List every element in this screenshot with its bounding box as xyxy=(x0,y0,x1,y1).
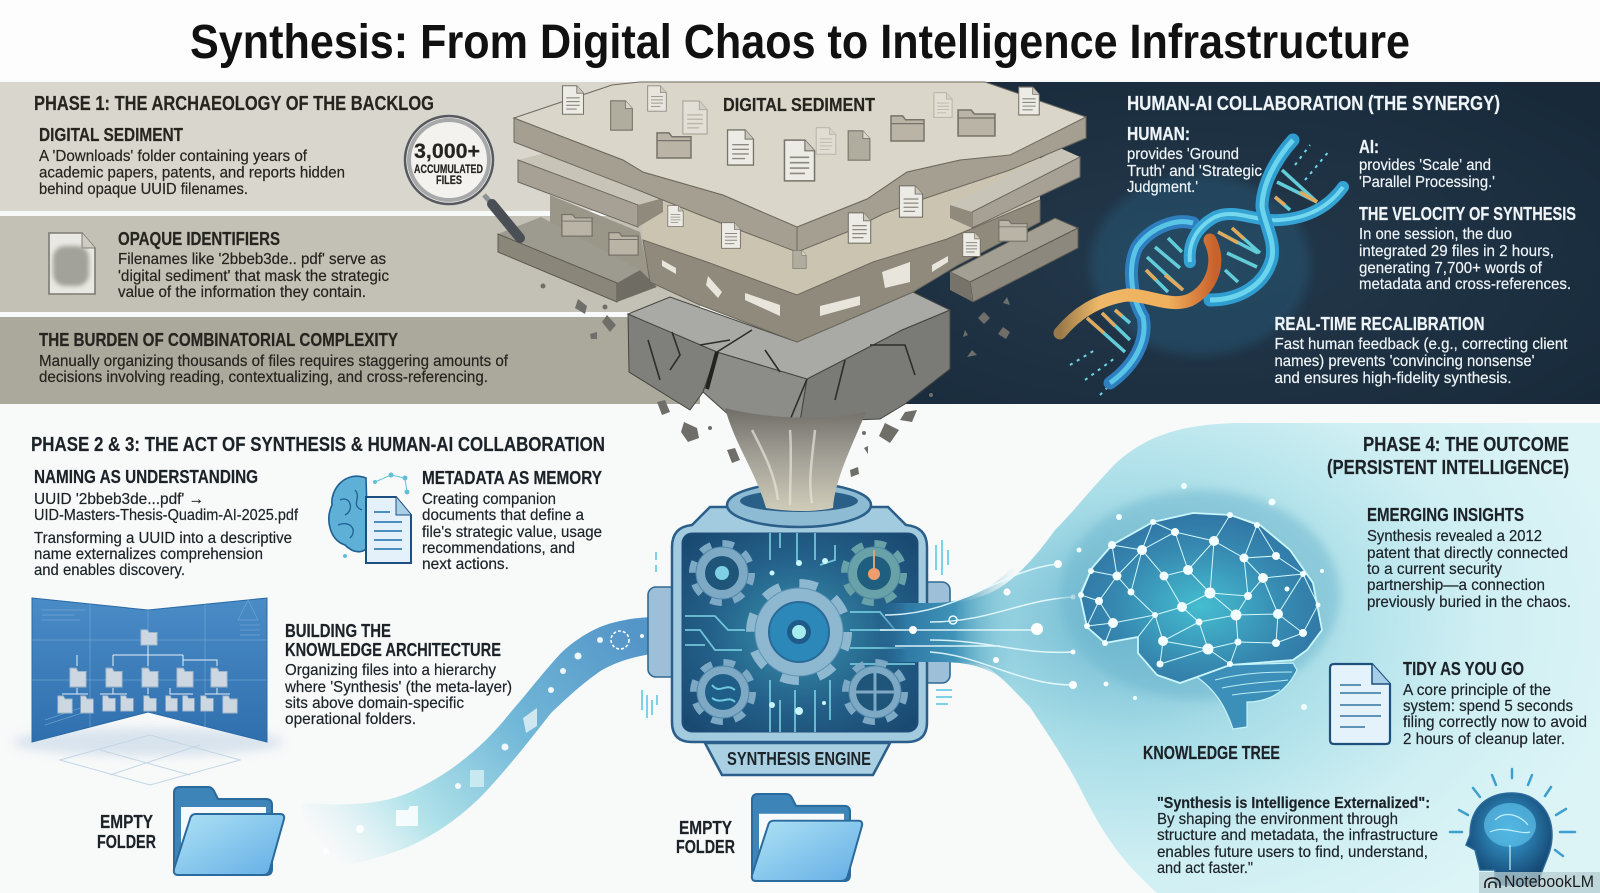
second slab xyxy=(518,148,1080,228)
text block: metadata as memory: Creating companion xyxy=(422,491,556,508)
panel content: human-ai collaboration xyxy=(1060,92,1576,395)
label: empty folder left: FOLDER xyxy=(97,832,156,852)
text block: building the knowledge architecture: KNOWLEDGE ARCHITECTURE xyxy=(285,640,501,660)
icon: empty folder left xyxy=(174,787,284,875)
icon: glowing knowledge brain xyxy=(1060,483,1340,729)
text block: ai role xyxy=(1359,137,1495,191)
text block: naming as understanding: name externalizes comprehension xyxy=(34,546,263,563)
scattered documents and folders xyxy=(562,86,1039,269)
text block: real-time recalibration: and ensures high-fidelity synthesis. xyxy=(1274,370,1512,387)
intake ring xyxy=(727,483,871,527)
text block: velocity of synthesis: generating 7,700+ words of xyxy=(1359,260,1543,277)
callout: synthesis quote: By shaping the environment through xyxy=(1157,811,1398,828)
text block: real-time recalibration: REAL-TIME RECALIBRATION xyxy=(1274,314,1484,334)
text block: building the knowledge architecture: operational folders. xyxy=(285,711,416,728)
text block: metadata as memory: file's strategic value, usage xyxy=(422,524,602,541)
side lugs xyxy=(648,587,678,677)
text block: real-time recalibration: names) prevents 'convincing nonsense' xyxy=(1274,353,1534,370)
chassis xyxy=(672,507,927,742)
gear top right xyxy=(844,544,904,602)
label: empty folder center: EMPTY xyxy=(679,818,732,838)
falling rock debris xyxy=(540,284,1010,477)
text block: emerging insights: Synthesis revealed a 2012 xyxy=(1367,528,1542,545)
callout: synthesis quote: "Synthesis is Intelligence Externalized": xyxy=(1157,795,1430,812)
engine nameplate xyxy=(705,743,890,775)
text block: building the knowledge architecture: sits above domain-specific xyxy=(285,695,464,712)
text block: combinatorial complexity: Manually organizing thousands of files requires staggering amounts of xyxy=(39,353,509,370)
title: Synthesis: From Digital Chaos to Intelligence Infrastructure xyxy=(190,16,1410,69)
text block: human role: Truth' and 'Strategic xyxy=(1127,163,1262,180)
flow ribbon from empty folder to engine xyxy=(301,617,660,870)
text block: opaque identifiers: value of the information they contain. xyxy=(118,284,366,301)
text block: real-time recalibration: Fast human feedback (e.g., correcting client xyxy=(1274,336,1568,353)
text block: velocity of synthesis: metadata and cross-references. xyxy=(1359,276,1571,293)
panel: phase 4 outcome background xyxy=(922,423,1600,893)
panel content: phase 2 and 3 xyxy=(13,433,862,881)
circuit traces xyxy=(685,533,918,732)
panel content: phase 1 xyxy=(34,92,875,386)
panel: phase 1 sediment bands xyxy=(0,82,1000,404)
text block: naming as understanding xyxy=(34,467,299,579)
central gear xyxy=(751,584,847,680)
text block: naming as understanding: UID-Masters-Thesis-Quadim-AI-2025.pdf xyxy=(34,507,299,524)
text block: metadata as memory: next actions. xyxy=(422,556,509,573)
heading: phase 4 xyxy=(1327,433,1569,479)
icon: blurred opaque document xyxy=(49,233,95,294)
text block: tidy as you go: system: spend 5 seconds xyxy=(1403,698,1573,715)
text block: building the knowledge architecture: Organizing files into a hierarchy xyxy=(285,662,496,679)
label: empty folder center xyxy=(676,818,735,857)
engine nameplate: SYNTHESIS ENGINE xyxy=(727,749,871,769)
text block: naming as understanding: Transforming a UUID into a descriptive xyxy=(34,530,292,547)
text block: real-time recalibration xyxy=(1274,314,1568,387)
callout: synthesis quote: structure and metadata, the infrastructure xyxy=(1157,827,1438,844)
text block: ai role: AI: xyxy=(1359,137,1379,157)
text block: velocity of synthesis xyxy=(1359,204,1576,293)
text block: emerging insights: to a current security xyxy=(1367,561,1502,578)
text block: building the knowledge architecture: where 'Synthesis' (the meta-layer) xyxy=(284,679,512,696)
text block: opaque identifiers: OPAQUE IDENTIFIERS xyxy=(118,229,280,249)
label: knowledge tree: KNOWLEDGE TREE xyxy=(1143,743,1280,763)
middle stratum xyxy=(640,150,1040,342)
sediment stream into engine xyxy=(725,408,866,511)
illustration: knowledge architecture blueprint xyxy=(13,598,283,785)
watermark: NotebookLM: NotebookLM xyxy=(1504,872,1594,891)
text block: metadata as memory xyxy=(422,468,602,573)
spark marks around engine xyxy=(642,540,952,718)
text block: human role: HUMAN: xyxy=(1127,124,1190,144)
panel content: phase 4 xyxy=(1143,433,1587,885)
text block: digital sediment: academic papers, patents, and reports hidden xyxy=(39,164,345,182)
text block: metadata as memory: recommendations, and xyxy=(422,540,575,557)
icon: empty folder center xyxy=(752,794,862,881)
icon: tidy document xyxy=(1330,664,1390,744)
text block: opaque identifiers: 'digital sediment' that mask the strategic xyxy=(118,268,389,285)
label: digital sediment strata: DIGITAL SEDIMENT xyxy=(723,95,875,115)
text block: tidy as you go: TIDY AS YOU GO xyxy=(1403,659,1524,679)
text block: emerging insights xyxy=(1367,505,1571,611)
text block: emerging insights: previously buried in the chaos. xyxy=(1367,594,1571,611)
label: empty folder center: FOLDER xyxy=(676,837,735,857)
text block: combinatorial complexity xyxy=(39,330,509,386)
text block: tidy as you go xyxy=(1403,659,1587,748)
text block: combinatorial complexity: THE BURDEN OF COMBINATORIAL COMPLEXITY xyxy=(39,330,398,350)
text block: tidy as you go: A core principle of the xyxy=(1403,682,1551,699)
panel: human-ai collaboration background xyxy=(860,82,1600,404)
icon: magnifier with file count: ACCUMULATED xyxy=(414,162,483,176)
data streams from engine to brain xyxy=(880,560,1077,689)
text block: combinatorial complexity: decisions involving reading, contextualizing, and cross-referencing. xyxy=(39,369,488,386)
text block: building the knowledge architecture: BUILDING THE xyxy=(285,621,391,641)
text block: human role: Judgment.' xyxy=(1127,179,1198,196)
text block: digital sediment: A 'Downloads' folder containing years of xyxy=(39,148,308,165)
text block: tidy as you go: filing correctly now to avoid xyxy=(1403,714,1587,731)
heading: phase 2 and 3: PHASE 2 & 3: THE ACT OF SYNTHESIS & HUMAN-AI COLLABORATION xyxy=(31,433,605,456)
heading: phase 1: PHASE 1: THE ARCHAEOLOGY OF THE BACKLOG xyxy=(34,92,434,115)
icon: head with glowing brain xyxy=(1450,769,1575,885)
text block: emerging insights: patent that directly connected xyxy=(1367,545,1568,562)
icon: magnifier with file count: 3,000+ xyxy=(414,140,480,163)
icon: magnifier with file count: FILES xyxy=(436,173,462,187)
text block: human role xyxy=(1127,124,1262,196)
text block: ai role: provides 'Scale' and xyxy=(1359,157,1491,174)
text block: tidy as you go: 2 hours of cleanup later. xyxy=(1403,731,1565,748)
text block: digital sediment: DIGITAL SEDIMENT xyxy=(39,125,183,145)
fractured bedrock block xyxy=(628,292,950,422)
lower left stratum xyxy=(498,195,657,302)
top slab xyxy=(514,82,1086,252)
label: empty folder left xyxy=(97,812,156,852)
text block: digital sediment: behind opaque UUID filenames. xyxy=(39,181,248,198)
text block: velocity of synthesis: In one session, the duo xyxy=(1359,226,1512,243)
text block: metadata as memory: documents that define a xyxy=(422,507,584,524)
callout: synthesis quote: enables future users to find, understand, xyxy=(1157,844,1428,861)
panel glow dots xyxy=(769,558,828,715)
text block: ai role: 'Parallel Processing.' xyxy=(1359,174,1495,191)
illustration: dna helix xyxy=(1060,140,1343,395)
callout: synthesis quote: and act faster." xyxy=(1157,860,1253,877)
heading: human-ai collaboration: HUMAN-AI COLLABORATION (THE SYNERGY) xyxy=(1127,92,1500,115)
illustration: synthesis engine xyxy=(642,408,952,775)
gear bottom left xyxy=(694,662,752,722)
gear bottom right xyxy=(846,662,904,722)
text block: human role: provides 'Ground xyxy=(1127,146,1239,163)
illustration: digital sediment strata xyxy=(498,82,1086,477)
text block: naming as understanding: UUID '2bbeb3de...pdf' → xyxy=(34,491,204,508)
icon: brain with document xyxy=(329,472,411,563)
text block: velocity of synthesis: integrated 29 files in 2 hours, xyxy=(1359,243,1554,260)
icon: magnifier with file count xyxy=(405,116,520,238)
text block: metadata as memory: METADATA AS MEMORY xyxy=(422,468,602,488)
callout: synthesis quote xyxy=(1157,795,1438,877)
text block: naming as understanding: and enables discovery. xyxy=(34,562,185,579)
text block: opaque identifiers: Filenames like '2bbeb3de.. pdf' serve as xyxy=(118,251,386,268)
text block: emerging insights: EMERGING INSIGHTS xyxy=(1367,505,1524,525)
gear top left xyxy=(692,544,752,602)
lower right stratum xyxy=(950,218,1078,302)
text block: opaque identifiers xyxy=(118,229,389,301)
text block: building the knowledge architecture xyxy=(284,621,512,728)
text block: emerging insights: partnership—a connection xyxy=(1367,577,1545,594)
text block: digital sediment xyxy=(39,125,345,198)
text block: naming as understanding: NAMING AS UNDERSTANDING xyxy=(34,467,258,487)
label: empty folder left: EMPTY xyxy=(100,812,153,832)
